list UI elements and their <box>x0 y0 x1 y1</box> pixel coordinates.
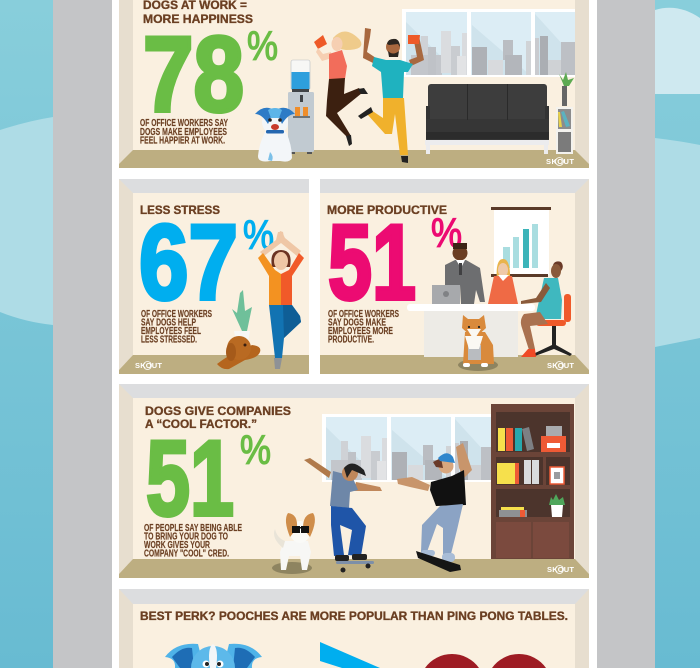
woman in coral top <box>488 259 518 304</box>
logo: skout: SKOUT <box>546 157 574 166</box>
body text <box>141 309 212 346</box>
stat: 67%: 67 <box>139 202 238 322</box>
stat: 51%: 51 <box>328 202 416 322</box>
man jumping <box>358 28 424 163</box>
desk <box>407 304 535 357</box>
body text: OF OFFICE WORKERS <box>328 309 399 320</box>
stat: 78%: 78 <box>143 14 244 134</box>
sofa <box>425 84 549 154</box>
side shelf with vase <box>556 72 574 154</box>
body text <box>144 523 242 560</box>
body text: EMPLOYEES FEEL <box>141 326 201 337</box>
bookcase <box>491 404 574 559</box>
heading: MORE PRODUCTIVE <box>327 203 447 217</box>
body text: FEEL HAPPIER AT WORK. <box>140 136 225 146</box>
window with skyline <box>322 414 495 482</box>
body text: OF PEOPLE SAY BEING ABLE <box>144 523 242 534</box>
body text: PRODUCTIVE. <box>328 334 374 346</box>
stat: 51%: % <box>240 427 271 473</box>
heading <box>143 0 253 26</box>
water cooler <box>288 60 314 154</box>
body text: SAY DOGS MAKE <box>328 318 386 328</box>
body text: EMPLOYEES MORE <box>328 326 393 337</box>
stat: 78%: % <box>247 23 278 69</box>
man in grey suit <box>445 243 485 304</box>
heading: MORE HAPPINESS <box>143 12 253 26</box>
woman in tree pose <box>258 231 304 369</box>
body text: OF OFFICE WORKERS SAY <box>140 118 228 129</box>
heading <box>145 404 291 431</box>
dog: blue ears <box>165 644 262 668</box>
logo: skout: SKOUT <box>547 565 574 574</box>
body text: LESS STRESSED. <box>141 334 197 346</box>
heading: DOGS GIVE COMPANIES <box>145 404 291 418</box>
panel: less stress <box>119 179 309 374</box>
dog: shiba <box>458 315 498 371</box>
stat: 67%: % <box>243 212 274 258</box>
room: walls and floor <box>320 179 589 374</box>
plant <box>232 290 252 347</box>
body text <box>140 118 228 146</box>
room: office walls and floor <box>119 0 589 168</box>
room: walls and floor <box>119 384 589 578</box>
heading: BEST PERK? POOCHES ARE MORE POPULAR THAN PING PONG TABLES. <box>140 609 568 623</box>
window with skyline <box>402 9 575 77</box>
body text: WORK GIVES YOUR <box>144 540 210 551</box>
skater left <box>304 458 382 572</box>
heading: A “COOL FACTOR.” <box>145 417 257 431</box>
panel: more happiness <box>119 0 589 168</box>
body text: TO BRING YOUR DOG TO <box>144 532 228 542</box>
panel: best perk <box>119 589 589 668</box>
room: walls <box>119 589 589 668</box>
logo: skout: SKOUT <box>135 361 162 370</box>
stat: 51%: 51 <box>146 418 234 538</box>
whiteboard bar chart <box>491 207 551 277</box>
dog: brown spaniel <box>217 336 260 369</box>
panel: more productive <box>320 179 589 374</box>
body text: COMPANY "COOL" CRED. <box>144 548 229 560</box>
panel: cool factor <box>119 384 589 578</box>
body text <box>328 309 399 346</box>
stat: 51%: % <box>431 210 462 256</box>
woman at desk with chair <box>521 261 572 357</box>
body text: DOGS MAKE EMPLOYEES <box>140 127 227 138</box>
icon: ping pong paddles <box>425 654 546 668</box>
woman jumping <box>314 31 368 146</box>
laptop <box>432 285 460 304</box>
heading: LESS STRESS <box>140 203 220 217</box>
chart: blue wedge <box>320 642 380 668</box>
logo: skout: SKOUT <box>547 361 574 370</box>
body text: SAY DOGS HELP <box>141 318 196 328</box>
room: walls and floor <box>119 179 309 374</box>
body text: OF OFFICE WORKERS <box>141 309 212 320</box>
dog: white and blue <box>255 108 295 162</box>
skater right <box>397 443 472 572</box>
dog: papillon with sunglasses <box>272 513 315 574</box>
